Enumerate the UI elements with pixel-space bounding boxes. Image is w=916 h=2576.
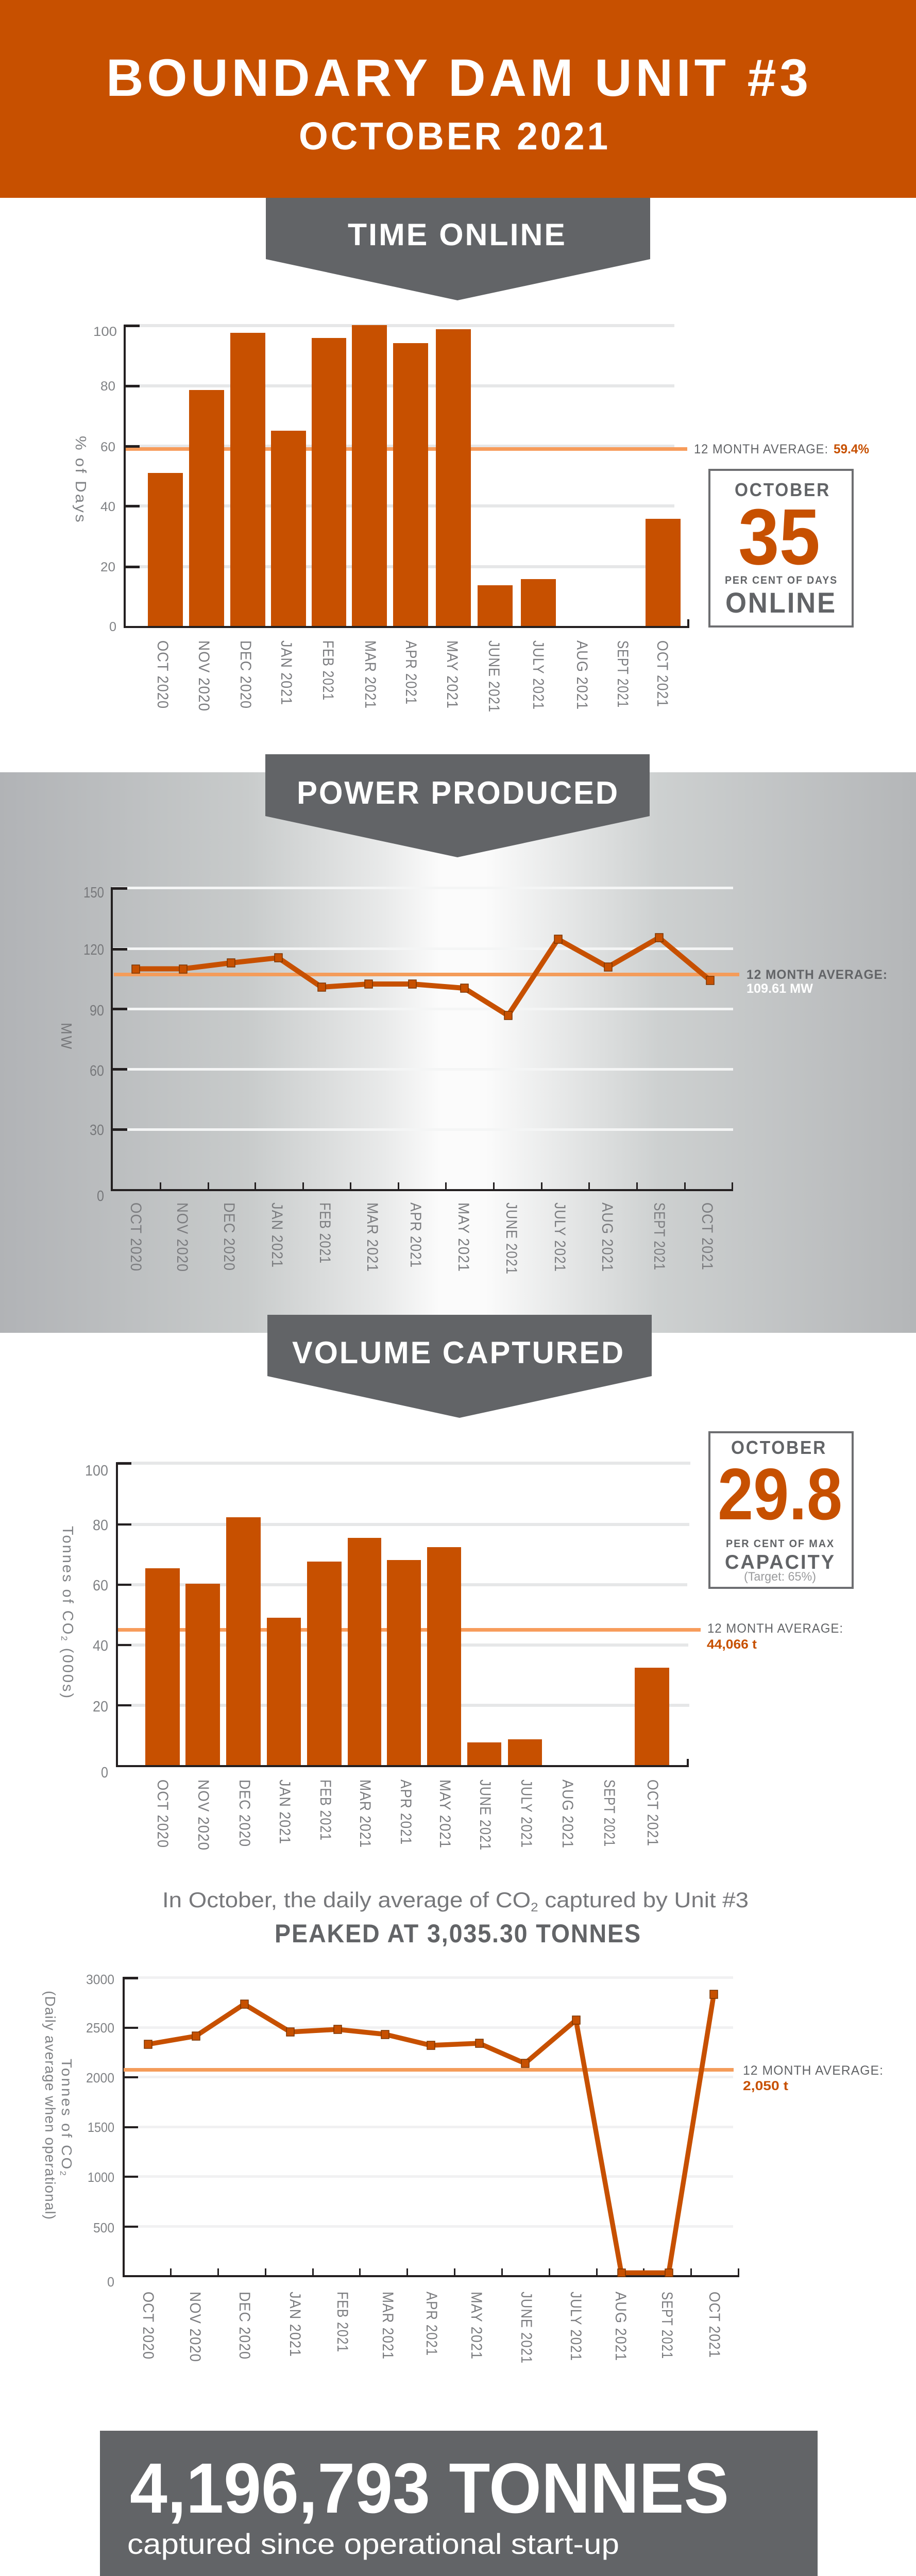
y axis title: 2 (59, 1636, 69, 1642)
daily average statement: In October, the daily average of CO (162, 1888, 501, 1912)
y axis labels: 1000 (88, 2170, 114, 2185)
average label: volume captured (707, 1621, 843, 1652)
callout: 29.8 per cent of max capacity: 29.8 (718, 1453, 842, 1535)
x axis labels: JULY 2021 (551, 1202, 568, 1272)
callout: 29.8 per cent of max capacity: CAPACITY (725, 1551, 836, 1573)
x axis labels: MAR 2021 (362, 640, 379, 709)
y axis labels: 60 (90, 1063, 104, 1079)
daily average statement: PEAKED AT 3,035.30 TONNES (275, 1919, 641, 1948)
12 month average line (124, 447, 687, 451)
callout: 35 per cent of days online: PER CENT OF DAYS (725, 574, 838, 586)
y axis title: (Daily average when operational) (42, 1991, 58, 2220)
bar chart: time online (72, 324, 689, 713)
x axis labels: MAR 2021 (379, 2292, 396, 2360)
total caption: captured since operational start-up (127, 2528, 619, 2560)
x axis labels: JUNE 2021 (477, 1780, 494, 1851)
y axis labels: 80 (100, 379, 115, 394)
average label: volume captured: 12 MONTH AVERAGE: (707, 1621, 843, 1636)
data line (148, 1994, 714, 2273)
panel: total tonnes captured (100, 2431, 818, 2576)
y axis labels (93, 325, 117, 634)
y axis labels: 0 (109, 620, 116, 634)
banner: volume captured (267, 1315, 652, 1418)
average label: daily CO2 (743, 2063, 884, 2093)
x axis labels (154, 1780, 661, 1851)
x axis labels: APR 2021 (402, 640, 419, 705)
y axis labels: 60 (100, 440, 115, 454)
y axis labels: 3000 (86, 1972, 114, 1987)
y axis labels: 0 (97, 1188, 104, 1205)
callout: 35 per cent of days online: OCTOBER (735, 479, 830, 500)
average label: time online: 59.4% (834, 442, 869, 456)
x axis labels: APR 2021 (423, 2292, 440, 2356)
y axis labels: 20 (93, 1699, 108, 1715)
x axis labels: JAN 2021 (276, 1780, 293, 1844)
y axis labels: 120 (83, 942, 104, 958)
y axis title: 2 (58, 2171, 67, 2177)
axes (111, 887, 733, 1191)
x axis labels: JULY 2021 (567, 2292, 584, 2361)
x axis labels: AUG 2021 (559, 1780, 576, 1849)
callout: 29.8 per cent of max capacity: OCTOBER (731, 1437, 827, 1458)
average label: daily CO2: 12 MONTH AVERAGE: (743, 2063, 884, 2078)
12 month average line (114, 973, 739, 976)
data line (135, 938, 710, 1015)
x axis labels: OCT 2021 (706, 2292, 723, 2358)
axes (124, 325, 689, 628)
x axis labels: FEB 2021 (334, 2292, 351, 2352)
y axis labels: 90 (90, 1003, 104, 1019)
x axis labels: JUNE 2021 (503, 1202, 520, 1275)
x axis labels: JAN 2021 (278, 640, 295, 705)
x axis labels: MAY 2021 (436, 1780, 453, 1849)
y axis title (42, 1991, 75, 2220)
x axis labels: APR 2021 (397, 1780, 414, 1845)
callout: 29.8 per cent of max capacity: PER CENT OF MAX (726, 1538, 835, 1550)
callout: 29.8 per cent of max capacity (709, 1432, 853, 1588)
x axis labels: JAN 2021 (268, 1202, 285, 1268)
average label: power produced (747, 968, 888, 996)
12 month average line (124, 2068, 734, 2072)
y axis labels: 100 (93, 325, 117, 339)
y axis title: Tonnes of CO (59, 2059, 75, 2165)
average label: time online: 12 MONTH AVERAGE: (694, 442, 828, 456)
x axis labels: APR 2021 (407, 1202, 424, 1268)
x axis labels: DEC 2020 (220, 1202, 238, 1271)
y axis labels: 60 (93, 1578, 108, 1594)
y axis labels: 0 (107, 2274, 114, 2290)
x axis labels (127, 1202, 716, 1275)
x axis labels: MAR 2021 (357, 1780, 374, 1848)
banner: time online (266, 198, 650, 300)
y axis labels: 150 (83, 885, 104, 901)
total figure: 4,196,793 TONNES (130, 2449, 729, 2528)
line chart: daily average CO2 (42, 1972, 739, 2364)
callout: 35 per cent of days online: 35 (738, 493, 820, 581)
x axis labels: OCT 2020 (154, 640, 171, 709)
axes (116, 1462, 689, 1767)
markers (144, 1990, 718, 2277)
subtitle: OCTOBER 2021 (299, 114, 610, 158)
callout: 35 per cent of days online: ONLINE (725, 586, 837, 619)
y axis labels: 1500 (88, 2120, 114, 2135)
x axis labels: NOV 2020 (195, 1780, 212, 1851)
x axis labels: MAR 2021 (364, 1202, 381, 1272)
x axis labels: DEC 2020 (237, 640, 254, 709)
daily average statement: 2 (531, 1901, 538, 1914)
y axis labels (85, 1463, 108, 1781)
x axis labels: NOV 2020 (186, 2292, 203, 2362)
x axis labels: AUG 2021 (612, 2292, 629, 2361)
y axis labels: 80 (93, 1517, 108, 1534)
x axis labels: DEC 2020 (236, 2292, 253, 2360)
x axis labels: MAY 2021 (455, 1202, 472, 1272)
x axis labels: OCT 2021 (699, 1202, 716, 1270)
panel: power produced background (0, 772, 916, 1333)
y axis labels: 2000 (86, 2070, 114, 2086)
y axis labels: 40 (100, 500, 115, 514)
y axis title: % of Days (72, 436, 89, 524)
bar chart: volume captured (59, 1462, 701, 1851)
x axis labels: FEB 2021 (317, 1780, 334, 1841)
x axis labels: JULY 2021 (530, 640, 547, 710)
x axis labels: OCT 2021 (654, 640, 671, 707)
y axis labels: 30 (90, 1122, 104, 1139)
12 month average line (117, 1628, 701, 1632)
y axis labels: 20 (100, 560, 115, 574)
y axis labels: 100 (85, 1463, 108, 1479)
x axis labels: AUG 2021 (573, 640, 590, 710)
x axis labels: NOV 2020 (195, 640, 212, 711)
average label: power produced: 12 MONTH AVERAGE: (747, 968, 888, 982)
y axis title: (000s) (59, 1642, 76, 1700)
x axis labels: SEPT 2021 (614, 640, 631, 708)
x axis labels: DEC 2020 (236, 1780, 253, 1847)
y axis labels: 2500 (86, 2020, 114, 2036)
x axis labels: JAN 2021 (286, 2292, 303, 2357)
y axis labels: 0 (101, 1765, 108, 1781)
average label: daily CO2: 2,050 t (743, 2079, 789, 2093)
callout: 29.8 per cent of max capacity: (Target: 65%) (744, 1570, 816, 1584)
x axis labels: SEPT 2021 (601, 1780, 618, 1847)
y axis title: Tonnes of CO (59, 1526, 76, 1636)
x axis labels: OCT 2020 (127, 1202, 144, 1272)
line chart: power produced (58, 885, 739, 1275)
banner: time online: TIME ONLINE (348, 217, 567, 252)
y axis labels: 500 (93, 2220, 114, 2235)
banner: power produced: POWER PRODUCED (297, 775, 619, 811)
bars (148, 325, 681, 626)
x axis labels: JUNE 2021 (485, 640, 502, 713)
y axis title: MW (58, 1023, 74, 1050)
y axis labels (83, 885, 104, 1205)
bars (145, 1517, 669, 1766)
x axis labels (154, 640, 671, 713)
x axis labels: SEPT 2021 (658, 2292, 675, 2359)
x axis labels: AUG 2021 (599, 1202, 616, 1272)
x axis labels: FEB 2021 (319, 640, 336, 701)
daily average statement: captured by Unit #3 (538, 1888, 749, 1912)
x axis labels: OCT 2020 (154, 1780, 171, 1848)
axes (123, 1977, 739, 2277)
callout: 35 per cent of days online (709, 470, 853, 626)
average label: power produced: 109.61 MW (747, 981, 813, 996)
x axis labels: JULY 2021 (518, 1780, 535, 1848)
banner: volume captured: VOLUME CAPTURED (292, 1335, 625, 1370)
x axis labels: MAY 2021 (444, 640, 461, 709)
x axis labels (140, 2292, 723, 2364)
header band (0, 0, 916, 198)
daily average statement (162, 1888, 749, 1948)
x axis labels: JUNE 2021 (518, 2292, 535, 2364)
banner: power produced (265, 754, 650, 857)
x axis labels: OCT 2020 (140, 2292, 157, 2360)
markers (132, 934, 714, 1020)
x axis labels: SEPT 2021 (651, 1202, 668, 1270)
x axis labels: MAY 2021 (468, 2292, 485, 2360)
average label: volume captured: 44,066 t (707, 1637, 757, 1652)
y axis labels (86, 1972, 114, 2290)
x axis labels: FEB 2021 (316, 1202, 333, 1264)
x axis labels: OCT 2021 (644, 1780, 661, 1846)
x axis labels: NOV 2020 (174, 1202, 191, 1272)
title: BOUNDARY DAM UNIT #3 (106, 48, 812, 107)
y axis labels: 40 (93, 1638, 108, 1654)
